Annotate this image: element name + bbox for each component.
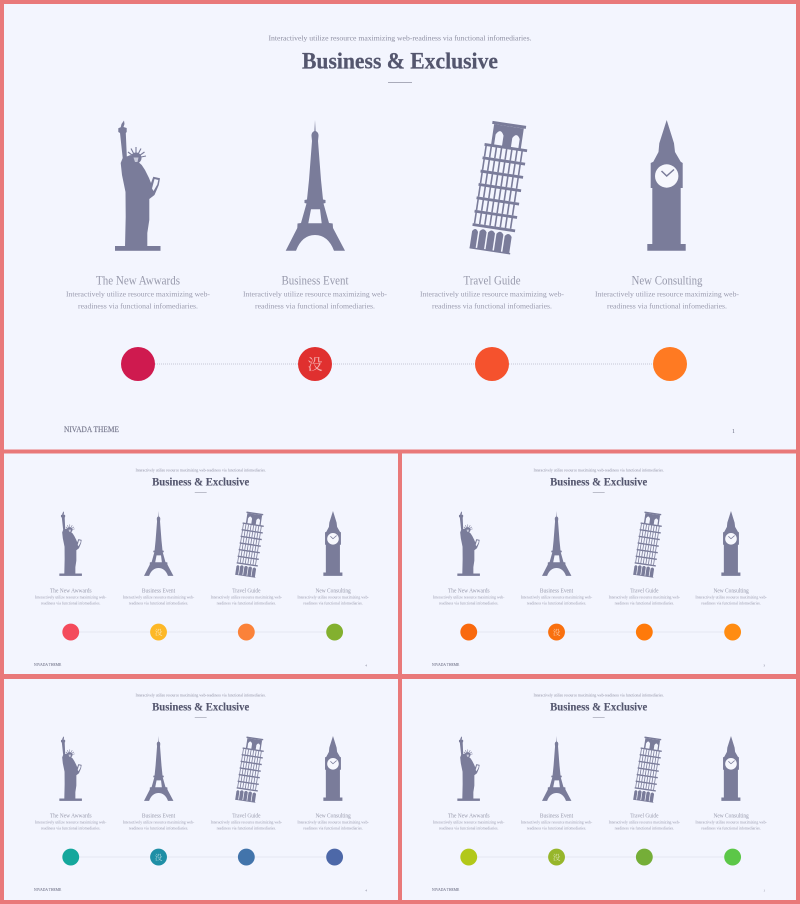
slide content: readiness via functional infomediaries.	[439, 827, 499, 831]
slide content: readiness via functional infomediaries.	[129, 827, 188, 831]
slide content: Business & Exclusive	[152, 701, 249, 713]
slide content: readiness via functional infomediaries.	[303, 602, 363, 606]
title underline	[388, 82, 412, 83]
column 4 text: Interactively utilize resource maximizing web-	[595, 290, 739, 298]
slide content: readiness via functional infomediaries.	[615, 827, 674, 831]
slide content: Business Event	[540, 588, 573, 595]
footer brand: NIVADA THEME	[64, 425, 119, 434]
column 2 text: Business Event	[282, 274, 349, 288]
slide content: 4	[365, 888, 367, 892]
slide content: Interactively utilize resource maximizing web-	[123, 821, 195, 825]
column 4 text	[595, 274, 739, 310]
slide content: readiness via functional infomediaries.	[217, 602, 276, 606]
slide content: New Consulting	[714, 813, 749, 820]
slide content: Business & Exclusive	[550, 476, 647, 488]
slide content: Interactively utilize resource maximizing web-	[695, 596, 768, 600]
column 1 text: readiness via functional infomediaries.	[78, 302, 198, 310]
slide content: Interactively utilize resource maximizing web-readiness via functional infomediaries.	[533, 469, 664, 473]
slide content: Interactively utilize resource maximizing web-	[609, 821, 681, 825]
column 2 text: readiness via functional infomediaries.	[255, 302, 375, 310]
slide content: Interactively utilize resource maximizing web-	[211, 596, 283, 600]
slide content: Business & Exclusive	[550, 701, 647, 713]
timeline	[121, 347, 687, 381]
slide content: The New Awwards	[50, 588, 92, 595]
slide content: New Consulting	[316, 813, 351, 820]
slide content: NIVADA THEME	[432, 662, 460, 667]
slide content: Business & Exclusive	[152, 476, 249, 488]
slide content: NIVADA THEME	[34, 662, 62, 667]
slide content: 没	[553, 852, 561, 863]
column 4 text: New Consulting	[632, 274, 703, 288]
slide content: Interactively utilize resource maximizing web-	[433, 596, 505, 600]
slide content: readiness via functional infomediaries.	[41, 827, 101, 831]
slide content: readiness via functional infomediaries.	[41, 602, 101, 606]
icon: Eiffel Tower	[286, 120, 345, 251]
slide content: NIVADA THEME	[432, 887, 460, 892]
slide content: Interactively utilize resource maximizing web-	[521, 821, 593, 825]
slide content: Business Event	[540, 813, 573, 820]
slide content: Interactively utilize resource maximizing web-	[433, 821, 505, 825]
column 3 text: readiness via functional infomediaries.	[432, 302, 552, 310]
slide content: 1	[763, 888, 765, 892]
title: Business & Exclusive	[302, 48, 498, 74]
icon: Leaning Tower of Pisa	[469, 120, 531, 255]
slide content: The New Awwards	[448, 588, 490, 595]
slide content: 4	[365, 663, 367, 667]
icon: Big Ben	[647, 120, 686, 251]
slide content: The New Awwards	[448, 813, 490, 820]
panel: main slide	[4, 4, 796, 450]
slide content: Interactively utilize resource maximizing web-	[297, 596, 370, 600]
slide content: 没	[553, 627, 561, 638]
slide content: The New Awwards	[50, 813, 92, 820]
slide content: readiness via functional infomediaries.	[527, 827, 586, 831]
column 1 text	[66, 274, 210, 310]
slide content: readiness via functional infomediaries.	[527, 602, 586, 606]
slide content: Travel Guide	[630, 588, 659, 595]
slide content: readiness via functional infomediaries.	[303, 827, 363, 831]
panel: small slide bottom right	[402, 679, 796, 900]
slide content: readiness via functional infomediaries.	[217, 827, 276, 831]
panel: small slide top left	[4, 454, 398, 674]
slide content: readiness via functional infomediaries.	[701, 602, 761, 606]
slide content: Interactively utilize resource maximizing web-readiness via functional infomediaries.	[135, 469, 266, 473]
slide content	[432, 694, 768, 892]
slide content: Interactively utilize resource maximizing web-	[521, 596, 593, 600]
column 2 text: Interactively utilize resource maximizing web-	[243, 290, 387, 298]
slide content: Interactively utilize resource maximizing web-	[297, 821, 370, 825]
slide content: Travel Guide	[232, 588, 261, 595]
slide content: Interactively utilize resource maximizing web-	[695, 821, 768, 825]
icon: Statue of Liberty	[115, 120, 160, 251]
slide content: Interactively utilize resource maximizing web-	[123, 596, 195, 600]
slide content: Business Event	[142, 588, 175, 595]
slide content: Interactively utilize resource maximizing web-readiness via functional infomediaries.	[135, 694, 266, 698]
column 4 text: readiness via functional infomediaries.	[607, 302, 727, 310]
slide content: readiness via functional infomediaries.	[701, 827, 761, 831]
slide content: Interactively utilize resource maximizing web-	[35, 596, 107, 600]
timeline: 没	[307, 354, 323, 374]
slide content: NIVADA THEME	[34, 887, 62, 892]
slide content: readiness via functional infomediaries.	[129, 602, 188, 606]
slide content: Interactively utilize resource maximizing web-	[609, 596, 681, 600]
slide content: Travel Guide	[630, 813, 659, 820]
column 3 text: Travel Guide	[464, 274, 521, 288]
slide content	[432, 469, 768, 667]
slide content: Travel Guide	[232, 813, 261, 820]
slide content: Business Event	[142, 813, 175, 820]
slide content: 没	[155, 852, 163, 863]
slide content: Interactively utilize resource maximizing web-readiness via functional infomediaries.	[533, 694, 664, 698]
slide content: 没	[155, 627, 163, 638]
slide content	[34, 469, 370, 667]
column 3 text	[420, 274, 564, 310]
slide content: New Consulting	[714, 588, 749, 595]
slide content: New Consulting	[316, 588, 351, 595]
slide content: Interactively utilize resource maximizing web-	[211, 821, 283, 825]
slide content: readiness via functional infomediaries.	[615, 602, 674, 606]
panel: small slide bottom left	[4, 679, 398, 900]
column 3 text: Interactively utilize resource maximizing web-	[420, 290, 564, 298]
column 1 text: Interactively utilize resource maximizing web-	[66, 290, 210, 298]
panel: small slide top right	[402, 454, 796, 674]
slide content	[34, 694, 370, 892]
slide content: readiness via functional infomediaries.	[439, 602, 499, 606]
column 1 text: The New Awwards	[96, 274, 180, 288]
slide content: Interactively utilize resource maximizing web-	[35, 821, 107, 825]
page number: 1	[732, 429, 735, 435]
subtitle: Interactively utilize resource maximizing web-readiness via functional infomediaries.	[268, 34, 532, 42]
slide content: 3	[763, 663, 765, 667]
column 2 text	[243, 274, 387, 310]
